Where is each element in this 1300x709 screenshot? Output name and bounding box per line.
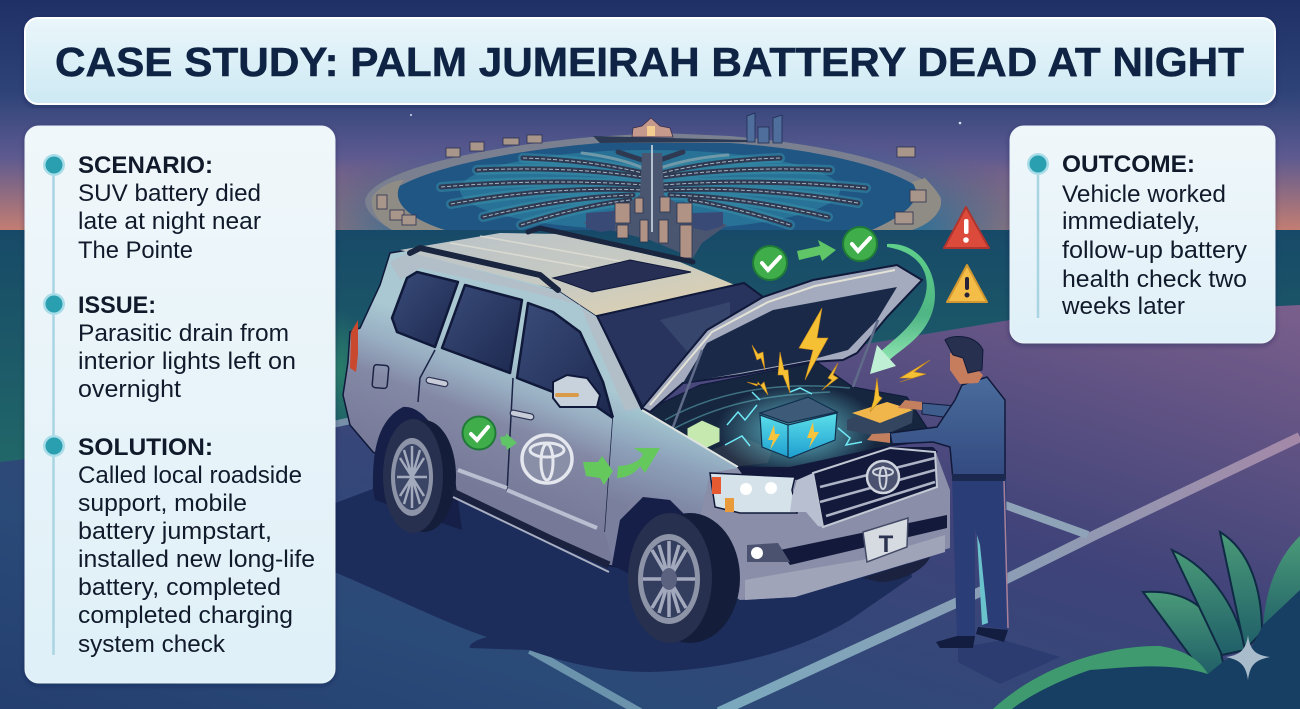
illustration: Palm Jumeirah island [365, 113, 941, 258]
electric arcs [725, 388, 862, 446]
section: solution: battery, completed [78, 574, 281, 601]
illustration: silver SUV: T [879, 531, 894, 558]
windshield [597, 283, 763, 408]
grille emblem [867, 461, 899, 493]
tail light [350, 320, 358, 372]
small side arrow [500, 433, 517, 450]
hands [867, 433, 890, 443]
foliage and sparkle [993, 532, 1300, 709]
rear wheel arch [373, 407, 462, 530]
washer bottle [687, 420, 720, 449]
section: solution: completed charging [78, 602, 293, 629]
right panel: outcome: OUTCOME: [1062, 151, 1195, 178]
section: scenario: The Pointe [78, 237, 193, 264]
side mirror [553, 375, 600, 407]
illustration: mechanic [867, 336, 1008, 648]
headlight [710, 473, 797, 513]
road surface [0, 305, 1300, 709]
front tire at right [862, 557, 930, 582]
section: solution [43, 434, 315, 658]
illustration: silver SUV [343, 228, 950, 643]
battery [760, 397, 837, 458]
section: scenario: late at night near [78, 208, 261, 235]
side check icon [462, 416, 496, 450]
torso and arm [890, 377, 1005, 480]
curved green arrow [870, 244, 935, 374]
background: dusk sky [0, 0, 1300, 231]
right panel: outcome: immediately, [1062, 208, 1200, 235]
section: scenario: SCENARIO: [78, 152, 213, 179]
section: scenario [43, 152, 261, 264]
open hood [642, 265, 922, 412]
right panel: outcome: Vehicle worked [1062, 181, 1226, 208]
rear wheel [383, 419, 456, 533]
hood struts [670, 320, 878, 435]
section: solution: Called local roadside [78, 462, 302, 489]
section: issue [43, 292, 296, 403]
fog lamp [747, 543, 790, 562]
front face [698, 450, 950, 600]
front wheel arch [612, 497, 712, 590]
rear arm [922, 403, 967, 418]
roof [400, 233, 761, 316]
door lines, fuel door and handles [372, 350, 613, 532]
head [950, 353, 983, 384]
sunroof [553, 260, 691, 292]
side body [343, 248, 738, 570]
section: solution: battery jumpstart, [78, 518, 272, 545]
right panel: outcome: follow-up battery [1062, 237, 1247, 264]
lightning bolts [747, 308, 930, 412]
legs [952, 478, 1008, 640]
bumper lip [745, 535, 945, 600]
section: issue: Parasitic drain from [78, 320, 289, 347]
mechanic shadow [958, 640, 1060, 684]
lower bumper slot [780, 515, 947, 565]
second battery [847, 402, 913, 437]
battery glow [716, 384, 880, 476]
left panel: case timeline [25, 126, 335, 683]
section: solution: installed new long-life [78, 546, 315, 573]
section: solution: system check [78, 631, 226, 658]
air box [712, 437, 772, 466]
parking lines [335, 416, 1300, 709]
section: scenario: SUV battery died [78, 180, 261, 207]
side windows [392, 272, 613, 418]
warning triangles [944, 207, 989, 302]
right panel: outcome: health check two [1062, 266, 1247, 293]
front fender [605, 410, 738, 560]
green door arrow [583, 448, 660, 485]
title: CASE STUDY: PALM JUMEIRAH BATTERY DEAD AT NIGHT [55, 39, 1244, 85]
right panel: outcome: weeks later [1061, 293, 1185, 320]
front wheel [628, 513, 740, 643]
licence plate [863, 518, 908, 562]
section: solution: support, mobile [78, 490, 247, 517]
check icons and arrow above hood [753, 227, 877, 280]
section: issue: interior lights left on [78, 348, 296, 375]
right panel: outcome [1010, 126, 1275, 343]
car shadow [330, 460, 912, 672]
shoes [936, 636, 975, 648]
section: issue: overnight [78, 376, 181, 403]
roof rails [410, 248, 558, 290]
sea at horizon [0, 230, 1300, 490]
section: issue: ISSUE: [78, 292, 156, 319]
side emblem [522, 435, 572, 483]
engine bay [647, 362, 935, 467]
door trim and step [453, 470, 609, 572]
section: solution: SOLUTION: [78, 434, 213, 461]
grille [813, 448, 937, 527]
title panel [25, 18, 1275, 104]
